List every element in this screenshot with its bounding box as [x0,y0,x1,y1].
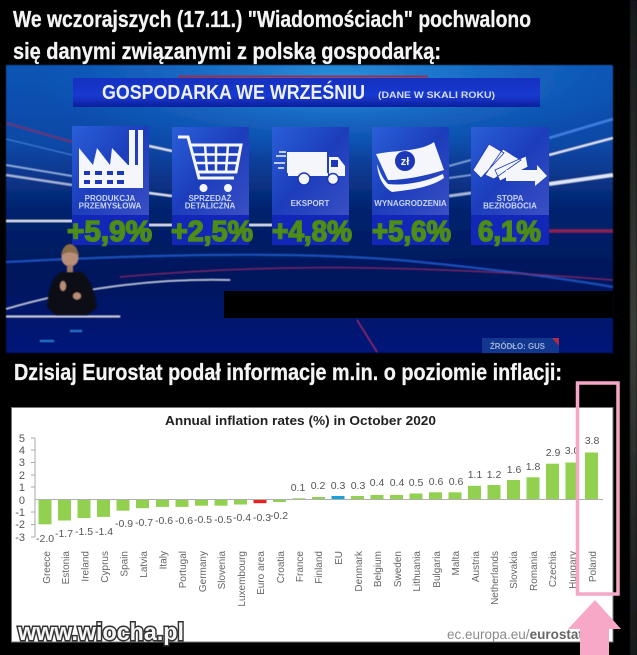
value labels: 0.3 [351,480,365,492]
value labels: -1.4 [95,526,113,538]
values row: 6,1% [478,216,541,248]
bars [38,452,598,524]
value labels: -0.5 [214,514,232,526]
values row: +4,8% [272,216,352,248]
value labels: 3.0 [565,445,579,457]
card: wynagrodzenia: WYNAGRODZENIA [374,199,447,208]
censor bar [224,291,613,318]
card: produkcja przemysłowa [72,126,149,245]
value labels: -0.2 [270,510,288,522]
values row: +2,5% [171,216,253,248]
value labels: -0.7 [135,517,153,529]
country labels: Bulgaria [432,551,443,588]
country labels: Sweden [393,551,404,587]
country labels: Luxembourg [237,551,248,607]
heading: yesterday's news [13,6,531,64]
country labels: Poland [588,551,599,582]
title banner: GOSPODARKA WE WRZEŚNIU [102,80,365,104]
y axis: -1 [15,507,25,519]
card: eksport [272,127,349,245]
country labels: Denmark [354,550,365,592]
values row: +5,9% [67,216,152,248]
heading: yesterday's news: się danymi związanymi z polską gospodarką: [13,38,441,64]
arrow: pointing to Poland [568,600,621,655]
icon: factory [79,130,143,188]
source tag: ŹRÓDŁO: GUS [490,342,546,351]
country labels [42,550,599,607]
panel: TV screenshot [6,65,613,353]
value labels: 1.2 [487,469,501,481]
icon: shopping cart [178,137,241,178]
value labels: 0.2 [311,480,325,492]
country labels: Hungary [568,551,579,589]
value labels: 2.9 [546,447,560,459]
y axis: 2 [19,470,25,482]
country labels: Germany [198,551,209,592]
heading: Eurostat: Dzisiaj Eurostat podał informacje m.in. o poziomie inflacji: [14,359,562,385]
card: sprzedaż detaliczna: SPRZEDAŻ [188,194,232,203]
value labels: -0.9 [115,518,133,530]
value labels: -0.6 [175,515,193,527]
icon: documents and arrow [473,144,528,181]
card: wynagrodzenia [372,127,449,245]
source url: ec.europa.eu/eurostat [447,627,583,642]
country labels: Latvia [139,551,150,578]
card: eksport: EKSPORT [291,199,329,208]
value labels: 0.6 [449,476,463,488]
icon: banknotes [376,142,444,180]
highlight frame: Poland [578,383,618,594]
right side strip [630,0,637,655]
country labels: Ireland [80,551,92,582]
panel: inflation chart [12,408,613,642]
country labels: Estonia [61,551,72,584]
value labels: -0.3 [253,512,271,524]
sign language interpreter [47,244,97,315]
country labels: Austria [471,551,482,582]
country labels: Malta [451,551,462,575]
country labels: EU [334,551,345,565]
values row [67,216,541,248]
value labels: 1.1 [468,469,482,481]
icon: truck [287,152,345,176]
country labels: France [295,551,306,582]
value labels: -2.0 [36,533,54,545]
y axis: -2 [15,519,25,531]
value labels: 0.3 [331,480,345,492]
value labels: -0.6 [155,515,173,527]
country labels: Italy [158,551,170,569]
value labels: 0.5 [409,477,423,489]
TV background [6,65,613,353]
card: stopa bezrobocia [471,127,549,245]
country labels: Netherlands [490,551,501,605]
source tag [482,338,559,353]
country labels: Slovenia [217,551,228,589]
value labels: -0.5 [194,514,212,526]
card: produkcja przemysłowa: PRZEMYSŁOWA [79,202,142,210]
country labels: Greece [42,551,53,584]
y axis: -3 [15,532,25,544]
y axis [15,433,35,544]
watermark: www.wiocha.pl [17,619,184,646]
y axis: 0 [19,495,25,507]
country labels: Finland [314,551,325,584]
country labels: Slovakia [509,551,520,589]
title banner [73,76,540,107]
value labels: 1.6 [507,464,521,476]
value labels: 1.8 [526,461,540,473]
country labels: Romania [529,551,540,591]
value labels: 0.6 [429,476,443,488]
value labels: -1.7 [55,528,73,540]
value labels: 3.8 [585,435,599,447]
country labels: Euro area [256,551,267,595]
chart title: Annual inflation rates (%) in October 2020 [165,413,436,428]
card: sprzedaż detaliczna [172,127,249,245]
country labels: Belgium [373,551,384,587]
y axis: 1 [19,482,25,494]
country labels: Portugal [178,551,189,588]
value labels [36,435,599,545]
country labels: Lithuania [412,551,423,592]
value labels: 0.4 [370,477,384,489]
country labels: Czechia [548,551,559,587]
value labels: 0.1 [291,482,305,494]
value labels: 0.4 [390,477,404,489]
country labels: Croatia [276,551,287,583]
values row: +5,6% [372,216,451,248]
card: wynagrodzenia: zł [401,156,409,168]
card: sprzedaż detaliczna: DETALICZNA [185,202,235,210]
card: stopa bezrobocia: BEZROBOCIA [483,202,537,210]
value labels: -1.5 [75,526,93,538]
y axis: 5 [19,433,25,445]
country labels: Cyprus [100,551,111,583]
y axis: 3 [19,457,25,469]
country labels: Spain [120,551,130,577]
y axis: 4 [19,445,25,457]
value labels: -0.4 [233,512,251,524]
card: stopa bezrobocia: STOPA [497,194,524,203]
heading: yesterday's news: We wczorajszych (17.11.) "Wiadomościach" pochwalono [13,6,531,32]
title banner: (DANE W SKALI ROKU) [378,90,495,101]
card: produkcja przemysłowa: PRODUKCJA [85,194,136,203]
